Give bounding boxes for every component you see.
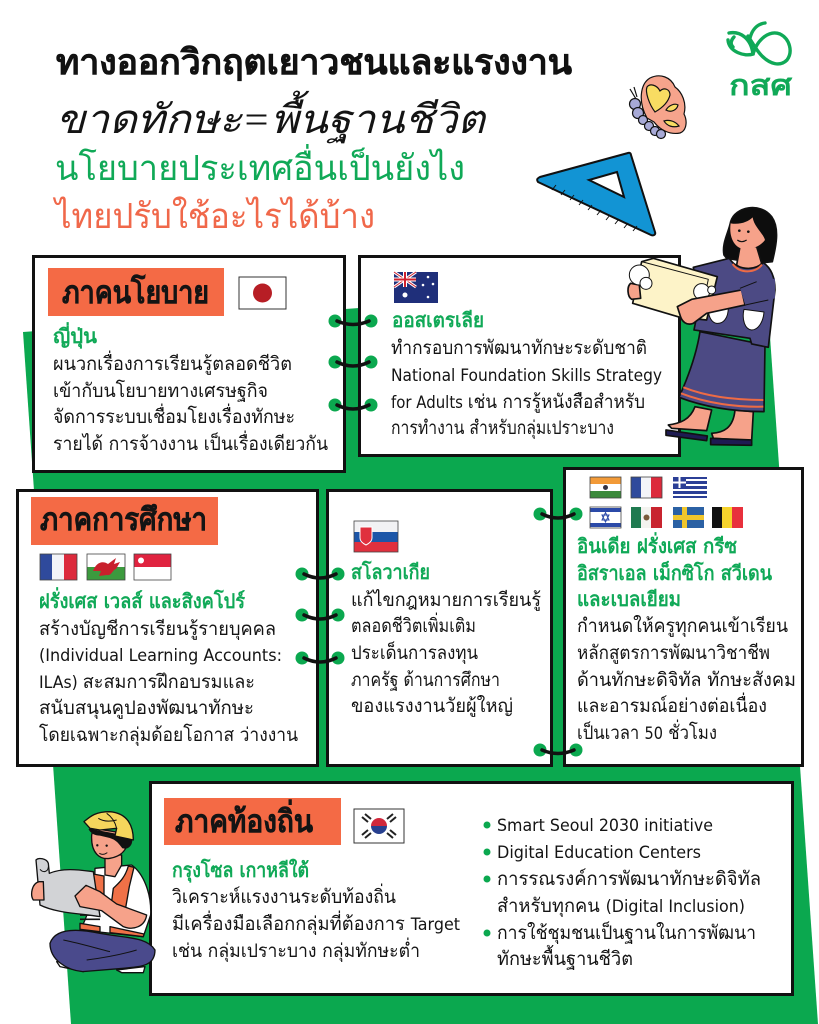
text: Slovakia (351, 560, 541, 717)
text: seven countries: และอารมณ์อย่างต่อเนื่อง (577, 692, 767, 717)
logo wordmark: กสศ (729, 68, 793, 102)
hands and stickers (628, 283, 641, 299)
green background shape (23, 279, 818, 1024)
title line 1: ทางออกวิกฤตเยาวชนและแรงงาน (56, 43, 572, 83)
text: seven countries: เป็นเวลา 50 ชั่วโมง (577, 719, 717, 744)
panel: local sector (150, 782, 792, 994)
bullet list: Seoul initiatives: Smart Seoul 2030 initiative (497, 816, 713, 835)
panel: policy sector (34, 256, 344, 472)
helmet (84, 812, 133, 840)
neck and head (105, 855, 122, 877)
text: Slovakia: ตลอดชีวิตเพิ่มเติม (351, 612, 476, 637)
text: France Wales Singapore: สนับสนุนคูปองพัฒนาทักษะ (39, 697, 254, 720)
bullet list: Seoul initiatives: การใช้ชุมชนเป็นฐานในการพัฒนา (497, 920, 756, 945)
text: Australia: ทำกรอบการพัฒนาทักษะระดับชาติ (391, 337, 647, 359)
text: Slovakia: แก้ไขกฎหมายการเรียนรู้ (351, 589, 541, 611)
panel: Australia (360, 256, 680, 456)
text: France Wales Singapore: ILAs) สะสมการฝึกอบรมและ (39, 671, 255, 693)
legs (668, 407, 712, 431)
text: seven countries: กำหนดให้ครูทุกคนเข้าเรียน (577, 615, 788, 638)
icon: set square ruler (537, 153, 655, 235)
text: Australia: for Adults เช่น การรู้หนังสือสำหรับ (391, 391, 645, 413)
panel: seven countries (564, 468, 802, 766)
neck and face (737, 247, 762, 269)
text: Australia: ออสเตรเลีย (392, 308, 484, 332)
paper plan (36, 859, 100, 917)
logo swirl mark (728, 23, 790, 64)
text: Australia (391, 308, 662, 440)
top (693, 258, 775, 347)
illustration: woman holding book (628, 208, 777, 445)
bullet list: Seoul initiatives (484, 816, 761, 970)
text: Seoul: วิเคราะห์แรงงานระดับท้องถิ่น (172, 883, 396, 908)
text: Australia: National Foundation Skills Strategy (391, 366, 662, 385)
text: Japan: ผนวกเรื่องการเรียนรู้ตลอดชีวิต (53, 350, 292, 375)
hair (89, 829, 132, 848)
flag: Mexico (631, 507, 662, 528)
legs (57, 962, 83, 972)
title line 4: ไทยปรับใช้อะไรได้บ้าง (52, 196, 375, 237)
vest (93, 866, 134, 912)
flag: Belgium (712, 507, 743, 528)
binder rings: policy panels (328, 314, 378, 412)
heading: local sector: ภาคท้องถิ่น (175, 799, 313, 840)
heading: education sector: ภาคการศึกษา (40, 502, 207, 538)
flag: South Korea (354, 809, 404, 843)
panel: Slovakia (328, 490, 552, 766)
heading: policy sector (48, 268, 224, 316)
title line 2 handwritten: ขาดทักษะ=พื้นฐานชีวิต (56, 90, 487, 144)
text: France Wales Singapore (39, 586, 298, 747)
heading: education sector (31, 497, 218, 545)
shirt (80, 865, 151, 937)
panel: education sector (18, 490, 318, 766)
flag: Japan (239, 277, 286, 309)
flag: France (631, 477, 662, 498)
title (52, 43, 572, 237)
text: France Wales Singapore: (Individual Learning Accounts: (39, 646, 282, 665)
text: Japan (53, 321, 328, 455)
arm (677, 290, 745, 324)
text: Japan: รายได้ การจ้างงาน เป็นเรื่องเดียวกัน (53, 430, 328, 455)
heading: policy sector: ภาคนโยบาย (62, 274, 209, 311)
text: France Wales Singapore: ฝรั่งเศส เวลส์ และสิงคโปร์ (39, 586, 245, 613)
binder rings: right panels (534, 508, 582, 756)
bullet list: Seoul initiatives: Digital Education Centers (497, 843, 701, 862)
illustration: worker reading plan (32, 812, 155, 973)
text: seven countries: อินเดีย ฝรั่งเศส กรีซ (577, 531, 737, 558)
flag: Sweden (673, 507, 704, 528)
text: Seoul: มีเครื่องมือเลือกกลุ่มที่ต้องการ Target (172, 910, 461, 936)
text: Slovakia: ประเด็นการลงทุน (351, 640, 478, 665)
text: Japan: เข้ากับนโยบายทางเศรษฐกิจ (53, 379, 268, 402)
text: Slovakia: สโลวาเกีย (351, 560, 430, 584)
hair back (723, 208, 777, 263)
text: seven countries: อิสราเอล เม็กซิโก สวีเดน (577, 560, 772, 585)
text: Slovakia: ภาครัฐ ด้านการศึกษา (351, 669, 500, 691)
text: Japan: จัดการระบบเชื่อมโยงเรื่องทักษะ (53, 403, 295, 428)
text: Seoul: เช่น กลุ่มเปราะบาง กลุ่มทักษะต่ำ (172, 937, 420, 963)
text: seven countries: หลักสูตรการพัฒนาวิชาชีพ (577, 642, 770, 664)
bullet list: Seoul initiatives: ทักษะพื้นฐานชีวิต (497, 945, 633, 970)
flag: India (590, 477, 621, 498)
text: Slovakia: ของแรงงานวัยผู้ใหญ่ (351, 695, 513, 717)
text: seven countries (577, 531, 796, 744)
flag: Singapore (134, 554, 171, 580)
text: Seoul: กรุงโซล เกาหลีใต้ (172, 858, 309, 883)
flag: Slovakia (354, 521, 398, 552)
text: France Wales Singapore: สร้างบัญชีการเรียนรู้รายบุคคล (39, 618, 276, 641)
text: seven countries: และเบลเยียม (577, 587, 681, 611)
flag: Israel (590, 507, 621, 528)
text: seven countries: ด้านทักษะดิจิทัล ทักษะสังคม (577, 669, 796, 691)
logo (728, 23, 793, 102)
bullet list: Seoul initiatives: การรณรงค์การพัฒนาทักษะดิจิทัล (497, 868, 761, 890)
pockets (708, 307, 728, 323)
flag: France (40, 554, 77, 580)
binder rings: education panels (296, 568, 344, 664)
icon: butterfly (630, 76, 686, 138)
heading: local sector (164, 798, 341, 845)
skirt (679, 332, 765, 412)
text: France Wales Singapore: โดยเฉพาะกลุ่มด้อยโอกาส ว่างงาน (39, 723, 298, 747)
text: Seoul (172, 858, 461, 963)
flag: Greece (673, 477, 707, 498)
sandals (666, 430, 707, 441)
hands and arm (32, 882, 44, 900)
flag: Wales (87, 554, 125, 580)
flag: Australia (394, 272, 438, 303)
book (633, 258, 717, 320)
text: Japan: ญี่ปุ่น (53, 321, 97, 349)
text: Australia: การทำงาน สำหรับกลุ่มเปราะบาง (391, 417, 614, 440)
title line 3: นโยบายประเทศอื่นเป็นยังไง (55, 144, 465, 189)
bullet list: Seoul initiatives: สำหรับทุกคน (Digital Inclusion) (497, 895, 745, 918)
